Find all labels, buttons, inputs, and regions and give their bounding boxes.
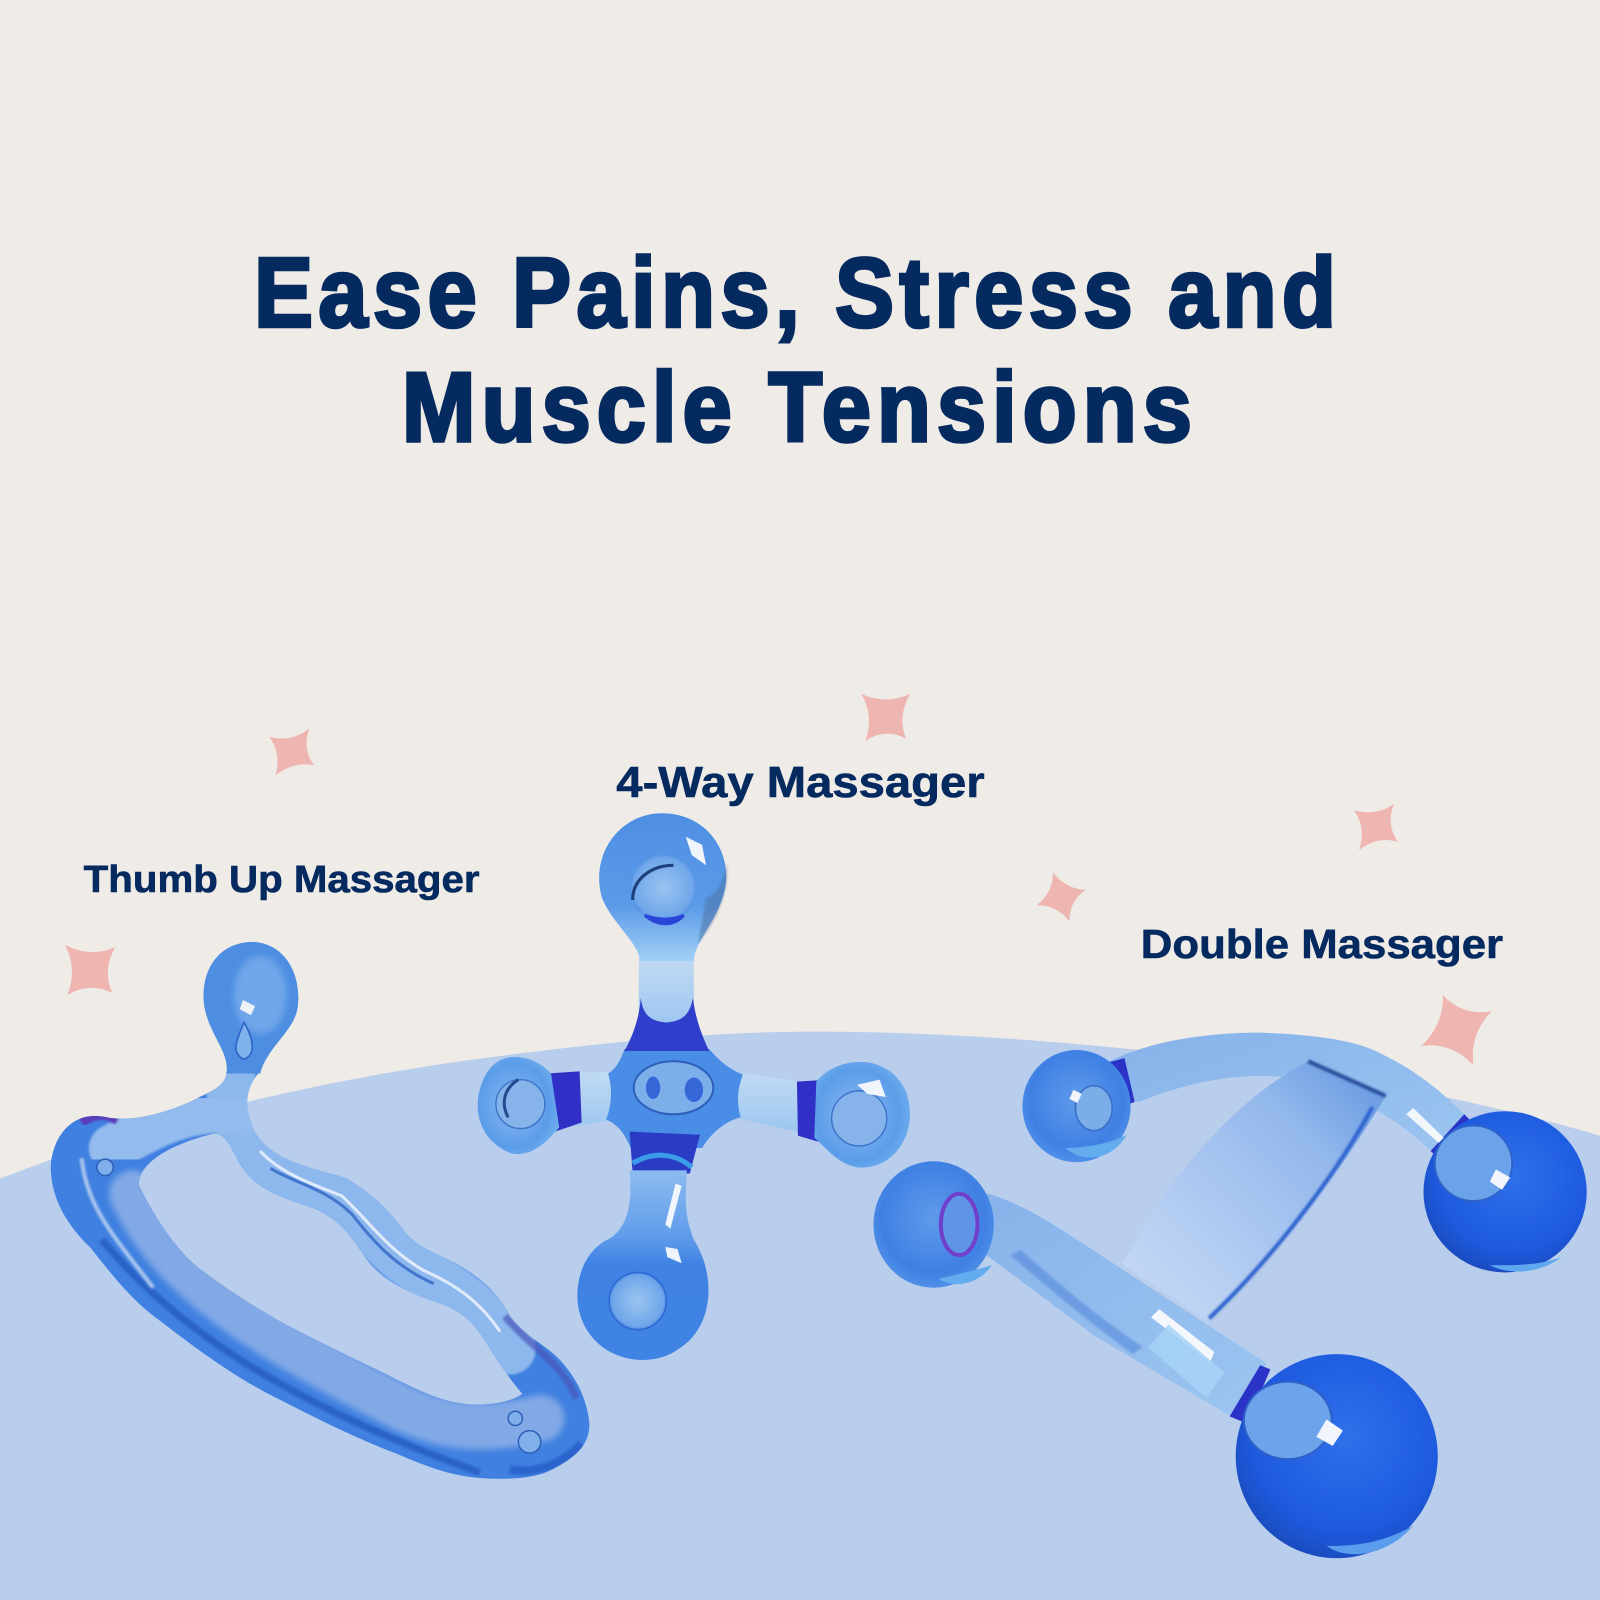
front left ball: [873, 1161, 994, 1288]
product: thumb up massager: [41, 942, 602, 1490]
front big ball: [1236, 1354, 1438, 1558]
arms: [547, 1071, 622, 1131]
front arm: [954, 1189, 1266, 1417]
label: 4-way massager: 4-Way Massager: [616, 758, 985, 807]
product: 4-way massager: [478, 813, 910, 1360]
title: Muscle Tensions: [402, 353, 1192, 462]
back left ball: [1022, 1050, 1131, 1162]
back arc handle: [1105, 1033, 1467, 1153]
right ball: [1423, 1111, 1587, 1272]
top ball: [599, 813, 726, 961]
title: Ease Pains, Stress and: [254, 238, 1336, 348]
sparkle stars: [65, 694, 1492, 1065]
label: double massager: Double Massager: [1141, 921, 1503, 967]
left ball: [478, 1057, 559, 1154]
thumb ball: [204, 942, 298, 1073]
back bands: [1105, 1058, 1135, 1108]
mould dots: [97, 1159, 541, 1453]
bridge: [1122, 1061, 1386, 1321]
hub purple collars: [624, 998, 709, 1051]
hub: [606, 1049, 743, 1148]
curved blue floor: [0, 1032, 1600, 1600]
hub inner lens: [634, 1061, 713, 1114]
product: double massager: [873, 1033, 1587, 1558]
bottom stem and ball: [577, 1170, 709, 1360]
right ball: [814, 1062, 910, 1168]
ring body: [41, 1061, 602, 1490]
label: thumb up massager: Thumb Up Massager: [84, 858, 480, 900]
top stem: [639, 957, 694, 1026]
title: [254, 238, 1336, 462]
